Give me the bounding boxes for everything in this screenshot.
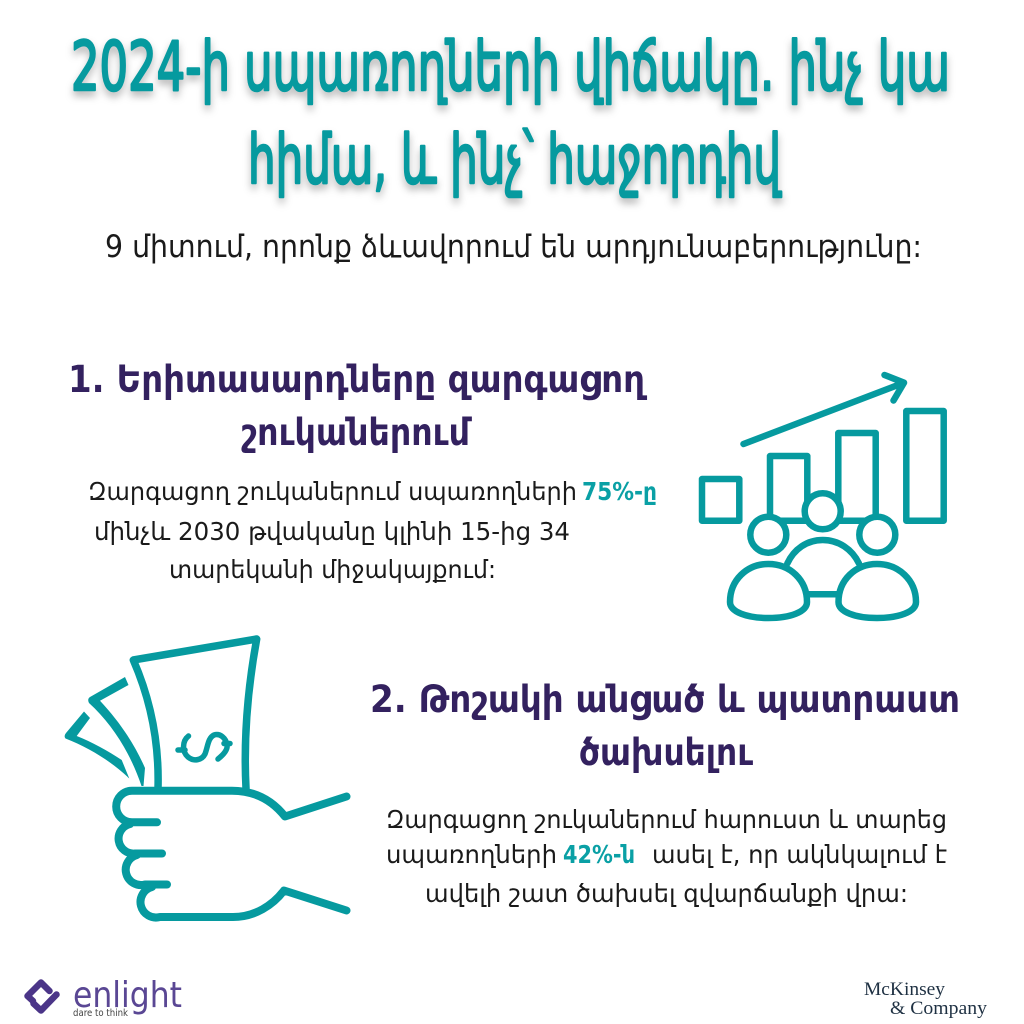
text block: trend 2: սպառողների bbox=[386, 840, 557, 869]
title bbox=[71, 28, 950, 200]
logo: enlight bbox=[28, 975, 182, 1019]
text block: trend 1: Զարգացող շուկաներում սպառողների bbox=[88, 477, 577, 506]
heading: trend 2: ծախսելու bbox=[579, 731, 753, 774]
logo: enlight: enlight bbox=[73, 975, 182, 1016]
text block: trend 1: մինչև 2030 թվականը կլինի 15-ից 34 bbox=[94, 517, 570, 546]
heading: trend 1: 1. Երիտասարդները զարգացող bbox=[68, 358, 648, 401]
text block: trend 2: 42%-ն bbox=[563, 840, 635, 869]
subtitle: 9 միտում, որոնք ձևավորում են արդյունաբերությունը: bbox=[105, 229, 922, 265]
logo: McKinsey & Company: McKinsey bbox=[864, 979, 946, 1000]
text block: trend 1: 75%-ը bbox=[582, 477, 657, 506]
logo: McKinsey & Company bbox=[864, 979, 988, 1019]
text block: trend 2: ասել է, որ ակնկալում է bbox=[652, 840, 947, 869]
logo: McKinsey & Company: & Company bbox=[890, 998, 988, 1019]
panel: trend 2 bbox=[65, 639, 960, 918]
heading: trend 2 bbox=[370, 678, 960, 774]
icon: hand holding money bbox=[65, 639, 346, 918]
panel: trend 1 bbox=[68, 358, 944, 618]
logo: enlight: dare to think bbox=[73, 1008, 128, 1019]
text block: trend 2: Զարգացող շուկաներում հարուստ և տարեց bbox=[386, 805, 947, 834]
icon: enlight diamond bbox=[28, 982, 56, 1010]
text block: trend 1 bbox=[88, 477, 657, 584]
text block: trend 2: ավելի շատ ծախսել զվարճանքի վրա: bbox=[425, 879, 908, 908]
icon: growth chart with people bbox=[702, 375, 944, 618]
text block: trend 1: տարեկանի միջակայքում: bbox=[169, 555, 496, 584]
text block: trend 2 bbox=[386, 805, 947, 908]
heading: trend 1: շուկաներում bbox=[241, 411, 472, 454]
heading: trend 2: 2. Թոշակի անցած և պատրաստ bbox=[370, 678, 960, 721]
heading: trend 1 bbox=[68, 358, 648, 454]
